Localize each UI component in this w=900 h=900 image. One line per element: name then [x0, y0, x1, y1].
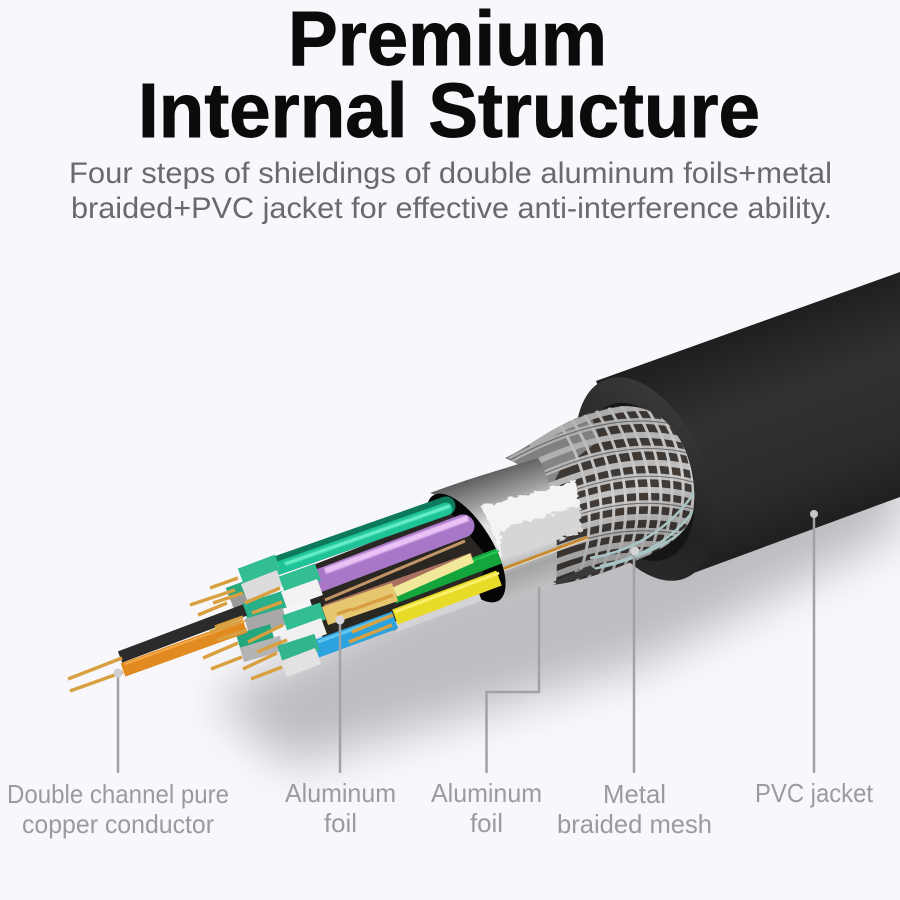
aluminum foil outer [430, 458, 600, 604]
front pairs [241, 563, 324, 669]
label: double channel pure copper conductor: Double channel pure [7, 779, 229, 809]
purple wire [318, 518, 468, 581]
label: aluminum foil outer [431, 778, 542, 838]
label: metal braided mesh [557, 779, 712, 839]
PVC jacket [548, 272, 900, 601]
black and orange pair [120, 610, 245, 670]
label: double channel pure copper conductor: copper conductor [22, 809, 214, 839]
label: aluminum foil inner: Aluminum [285, 778, 396, 808]
teal wire [270, 506, 450, 571]
label: aluminum foil inner [285, 778, 396, 838]
yellow wire [395, 573, 499, 617]
thin copper wires [325, 541, 465, 600]
title [138, 0, 760, 154]
leader: outer aluminum foil [486, 587, 539, 773]
blue wire [316, 615, 395, 649]
subtitle [69, 157, 832, 225]
label: metal braided mesh: Metal [603, 779, 666, 809]
leader: PVC jacket [810, 510, 818, 773]
dark wire core [300, 512, 490, 645]
label: aluminum foil inner: foil [324, 808, 357, 838]
label: metal braided mesh: braided mesh [557, 809, 712, 839]
subtitle: braided+PVC jacket for effective anti-interference ability. [71, 192, 832, 225]
back pairs [228, 586, 285, 655]
leader: inner aluminum foil [336, 616, 344, 773]
leader: metal braided mesh [630, 546, 640, 773]
copper conductors [68, 578, 393, 691]
gray wire [395, 596, 480, 627]
cable shadow [215, 420, 900, 765]
inner wires [68, 506, 499, 691]
metal braided mesh [505, 406, 694, 585]
green wire [393, 551, 499, 596]
subtitle: Four steps of shieldings of double aluminum foils+metal [69, 157, 832, 190]
label: aluminum foil outer: Aluminum [431, 778, 542, 808]
label: PVC jacket: PVC jacket [755, 778, 874, 808]
cable illustration [68, 272, 900, 691]
title: Internal Structure [138, 68, 760, 154]
cable opening [411, 482, 521, 614]
label: aluminum foil outer: foil [470, 808, 503, 838]
label: double channel pure copper conductor [7, 779, 229, 839]
pale yellow wire [325, 558, 472, 616]
leader: double channel conductor [114, 668, 122, 773]
